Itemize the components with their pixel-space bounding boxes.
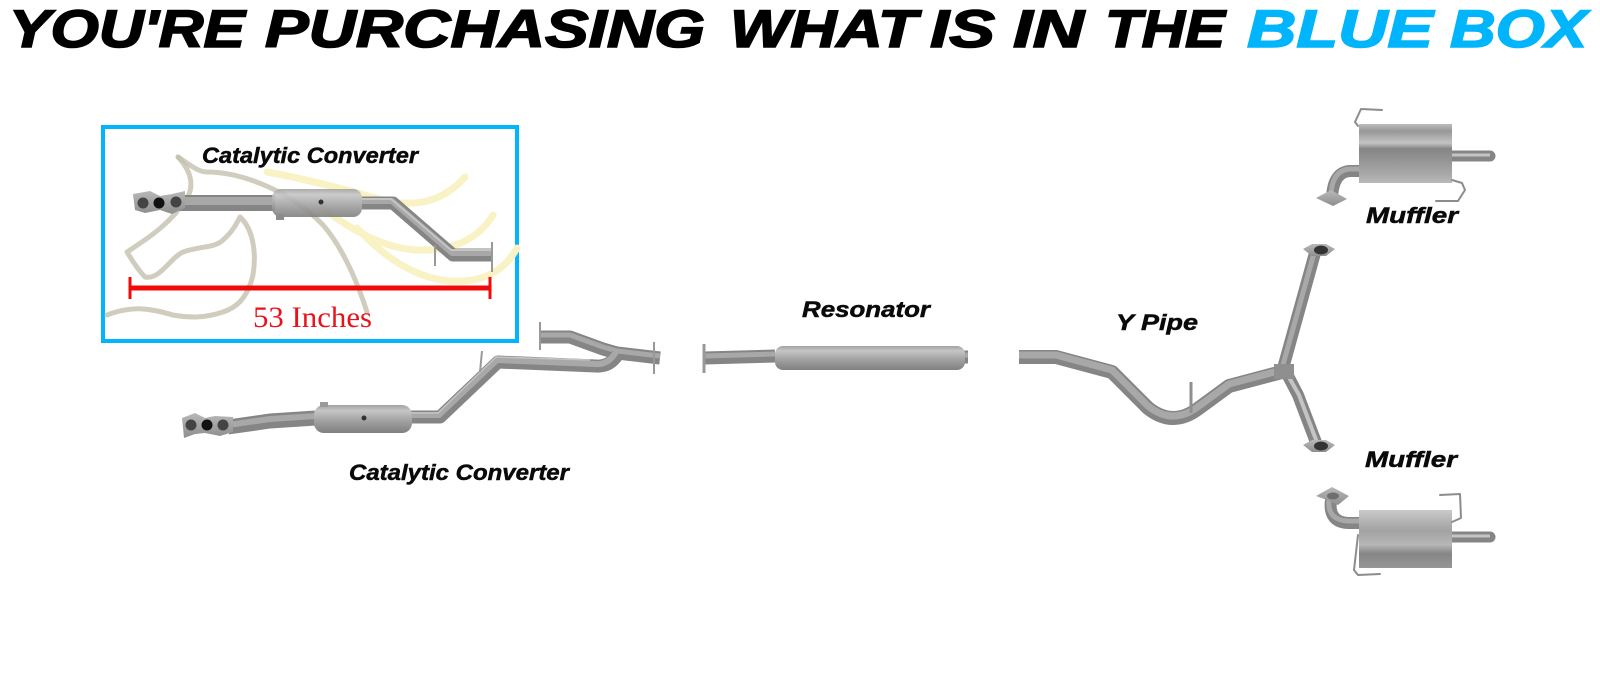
title: IN xyxy=(1013,0,1086,59)
label: upper muffler: Muffler xyxy=(1366,203,1460,228)
title xyxy=(9,0,1590,59)
title: THE xyxy=(1105,0,1227,59)
exhaust part: lower muffler xyxy=(1316,487,1490,575)
label: catalytic converter: Catalytic Converter xyxy=(349,460,571,485)
label: 53 inches: 53 Inches xyxy=(253,301,372,334)
title: PURCHASING xyxy=(265,0,705,59)
exhaust part: Y pipe xyxy=(1019,244,1335,452)
label: resonator: Resonator xyxy=(802,297,932,322)
dimension line: 53 inches xyxy=(130,277,490,299)
exhaust part: catalytic converter with twin pipes xyxy=(182,322,660,438)
title: BLUE xyxy=(1247,0,1435,59)
title: BOX xyxy=(1450,0,1590,59)
exhaust part: upper muffler xyxy=(1316,109,1490,206)
title: YOU'RE xyxy=(9,0,247,59)
exhaust part: resonator xyxy=(704,344,968,373)
title: IS xyxy=(930,0,995,59)
label: Y pipe: Y Pipe xyxy=(1116,310,1198,335)
label: lower muffler: Muffler xyxy=(1365,447,1459,472)
title: WHAT xyxy=(730,0,923,59)
exhaust part: catalytic converter (box) xyxy=(133,189,492,272)
horse head watermark xyxy=(107,157,517,317)
label: catalytic converter (box): Catalytic Converter xyxy=(202,143,420,168)
panel: blue box with catalytic converter detail xyxy=(103,127,517,341)
